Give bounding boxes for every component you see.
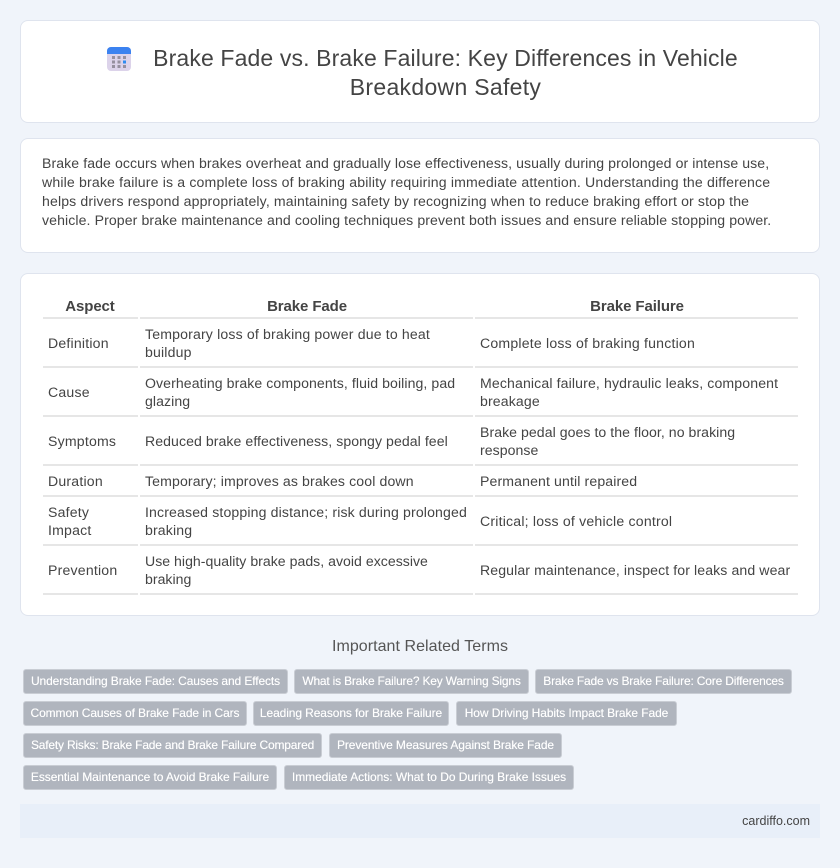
related terms tags: What is Brake Failure? Key Warning Signs <box>302 674 521 688</box>
related terms tags: Immediate Actions: What to Do During Brake Issues <box>292 770 566 784</box>
table header row: Brake Fade <box>267 298 347 315</box>
related terms tags: How Driving Habits Impact Brake Fade <box>465 706 668 720</box>
row: safety impact: Increased stopping distance; risk during prolonged <box>145 504 467 520</box>
icon: calendar <box>107 47 131 71</box>
row: definition: Complete loss of braking function <box>480 335 695 351</box>
related terms tags: Brake Fade vs Brake Failure: Core Differences <box>543 674 784 688</box>
row: prevention: Regular maintenance, inspect for leaks and wear <box>480 562 790 578</box>
row: symptoms: Brake pedal goes to the floor, no braking <box>480 424 735 440</box>
row: cause: Mechanical failure, hydraulic leaks, component <box>480 375 778 391</box>
intro text <box>42 155 771 228</box>
footer source: cardiffo.com <box>742 814 810 828</box>
row: symptoms: Symptoms <box>48 433 116 449</box>
intro text: vehicle. Proper brake maintenance and cooling techniques prevent both issues and ensure reliable stopping power. <box>42 212 771 228</box>
intro text: Brake fade occurs when brakes overheat and gradually lose effectiveness, usually during prolonged or intense use, <box>42 155 769 171</box>
row: duration: Temporary; improves as brakes cool down <box>145 473 414 489</box>
title: Breakdown Safety <box>350 74 541 100</box>
row: safety impact: Impact <box>48 522 92 538</box>
title <box>153 45 738 100</box>
row: definition <box>43 326 798 368</box>
row: definition: Temporary loss of braking power due to heat <box>145 326 430 342</box>
row: prevention: Prevention <box>48 562 117 578</box>
intro panel <box>20 138 820 253</box>
row: symptoms <box>43 424 798 466</box>
related terms tags: Understanding Brake Fade: Causes and Effects <box>31 674 280 688</box>
related terms tags: Leading Reasons for Brake Failure <box>260 706 442 720</box>
row: cause: glazing <box>145 393 190 409</box>
related terms tags: Common Causes of Brake Fade in Cars <box>31 706 239 720</box>
row: cause: breakage <box>480 393 540 409</box>
table header row <box>43 298 798 319</box>
table header row: Brake Failure <box>590 298 684 315</box>
row: symptoms: response <box>480 442 538 458</box>
row: safety impact: Safety <box>48 504 89 520</box>
related terms tags: Essential Maintenance to Avoid Brake Failure <box>31 770 269 784</box>
row: safety impact: Critical; loss of vehicle control <box>480 513 672 529</box>
row: symptoms: Reduced brake effectiveness, spongy pedal feel <box>145 433 448 449</box>
table header row: Aspect <box>65 298 115 315</box>
related terms tags: Preventive Measures Against Brake Fade <box>337 738 554 752</box>
header panel <box>20 20 820 123</box>
comparison table panel <box>20 273 820 616</box>
related terms tags: Safety Risks: Brake Fade and Brake Failure Compared <box>31 738 314 752</box>
footer bar <box>20 804 820 838</box>
row: safety impact <box>43 504 798 546</box>
intro text: while brake failure is a complete loss of braking ability requiring immediate attention. Understanding the difference <box>42 174 770 190</box>
row: cause: Overheating brake components, fluid boiling, pad <box>145 375 455 391</box>
row: definition: Definition <box>48 335 109 351</box>
row: prevention <box>43 553 798 595</box>
row: prevention: Use high-quality brake pads, avoid excessive <box>145 553 428 569</box>
related terms tags <box>23 669 792 790</box>
row: duration: Permanent until repaired <box>480 473 637 489</box>
row: prevention: braking <box>145 571 191 587</box>
row: safety impact: braking <box>145 522 192 538</box>
related terms heading: Important Related Terms <box>332 638 508 655</box>
comparison table <box>43 298 798 595</box>
row: definition: buildup <box>145 344 192 360</box>
row: duration: Duration <box>48 473 103 489</box>
row: cause: Cause <box>48 384 90 400</box>
intro text: helps drivers respond appropriately, maintaining safety by recognizing when to reduce braking effort or stop the <box>42 193 749 209</box>
row: duration <box>43 473 798 497</box>
title: Brake Fade vs. Brake Failure: Key Differences in Vehicle <box>153 45 738 71</box>
row: cause <box>43 375 798 417</box>
